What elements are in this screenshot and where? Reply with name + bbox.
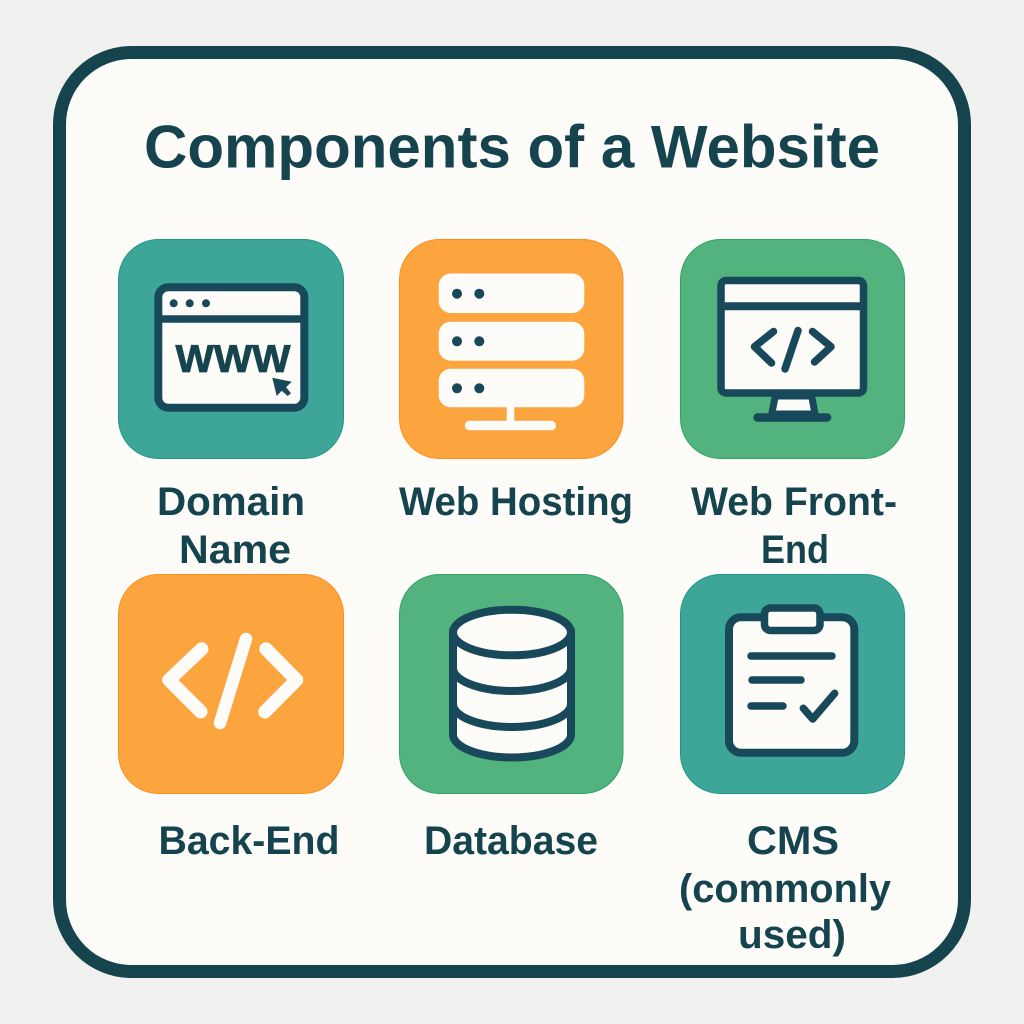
icon: web front-end [680, 240, 904, 458]
label: name: Name [179, 528, 291, 572]
icon: domain name: WWW [176, 338, 291, 381]
label: cms: CMS [747, 819, 839, 863]
label: web front-end: Web Front- [691, 480, 897, 524]
label: end: End [761, 528, 829, 572]
label: back-end: Back-End [158, 819, 340, 863]
label: used: used) [738, 913, 846, 957]
label: domain name: Domain [157, 480, 305, 524]
title: Components of a Website [144, 114, 880, 180]
label: database: Database [424, 819, 598, 863]
label: commonly: (commonly [679, 867, 892, 911]
icon: web hosting [400, 240, 623, 458]
icon: cms [680, 574, 904, 794]
icon: back-end [118, 574, 344, 794]
label: web hosting: Web Hosting [399, 480, 633, 524]
icon: domain name [118, 240, 344, 458]
panel: main card [60, 52, 964, 972]
icon: database [400, 574, 623, 794]
